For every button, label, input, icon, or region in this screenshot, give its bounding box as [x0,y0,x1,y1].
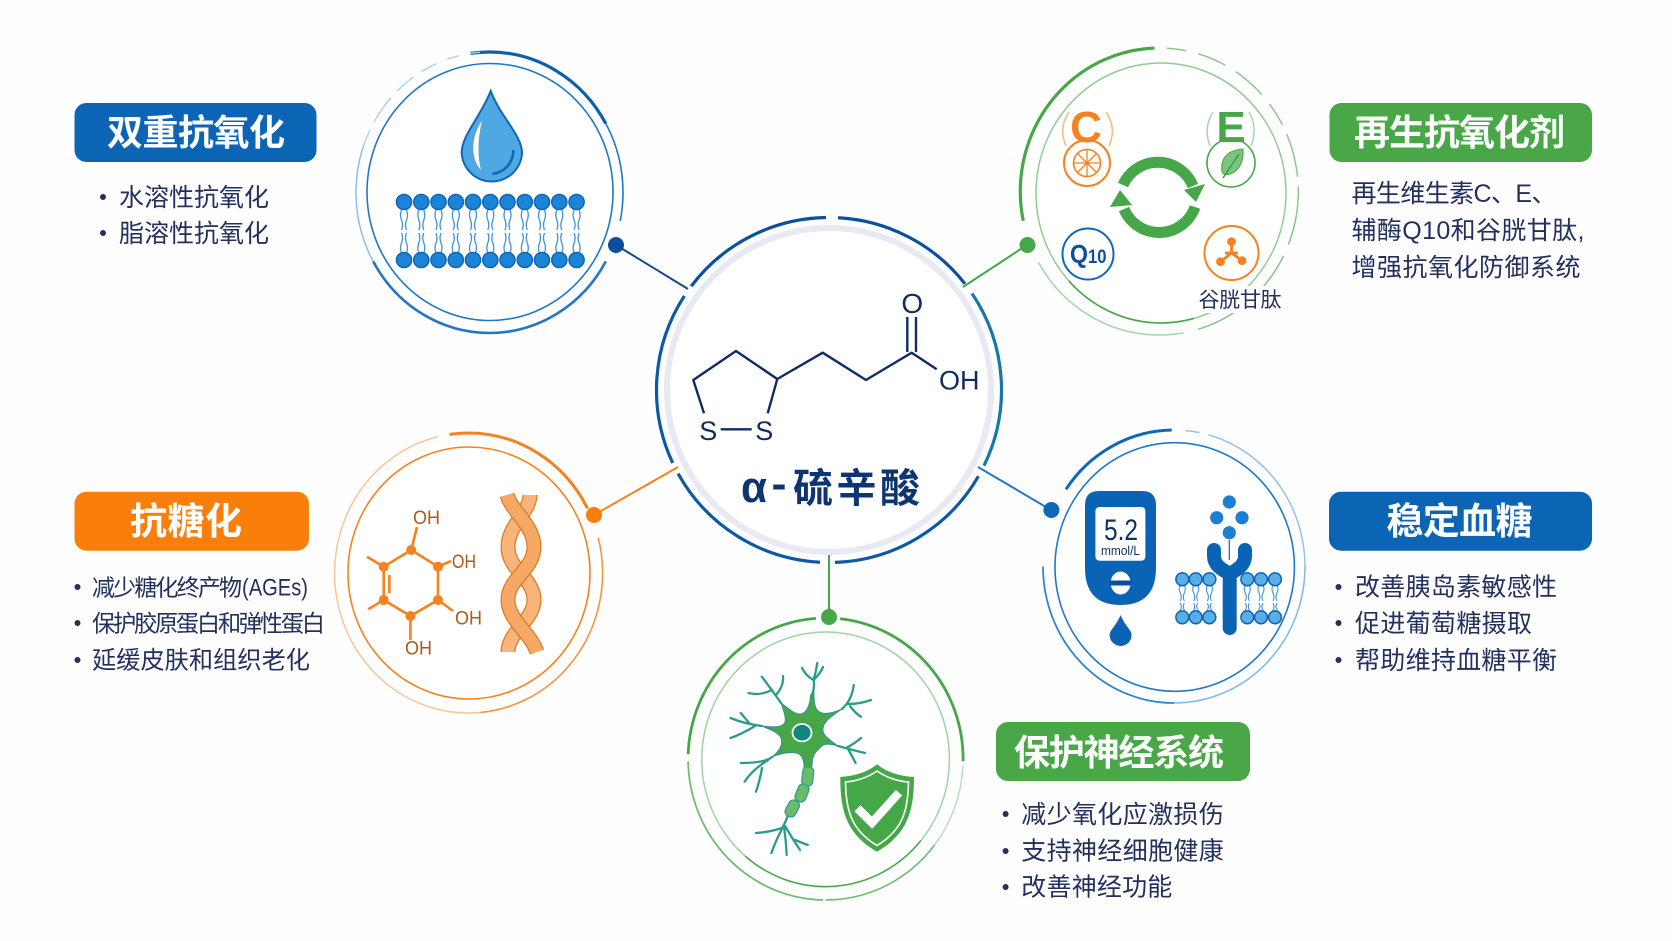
molecule: lipoic acid structure: OH [939,366,980,396]
heading: protect nervous system [996,722,1250,781]
icon: water drop [462,91,522,181]
central title: - [772,460,786,507]
icon: insulin receptor in membrane [1176,495,1281,628]
panel: dual antioxidant [74,52,624,333]
connector node [586,507,602,523]
connector node [1043,502,1059,518]
icon circle: neuron and shield [688,609,963,900]
label: glutathione: 谷胱甘肽 [1198,289,1282,312]
list: anti-glycation: 延缓皮肤和组织老化 [92,648,310,674]
heading: anti-glycation: 抗糖化 [130,501,242,542]
list: protect nervous system: 支持神经细胞健康 [1021,838,1224,866]
heading: dual antioxidant: 双重抗氧化 [107,112,285,153]
icon: coenzyme Q10 [1062,228,1114,280]
text: regenerated antioxidants description [1352,180,1584,282]
list: protect nervous system: 改善神经功能 [1021,874,1172,902]
text: regenerated antioxidants description: 再生维生素C、E、 [1352,180,1556,208]
list: stable blood sugar [1336,574,1557,675]
icon: glutathione [1204,226,1258,280]
molecule: lipoic acid structure [693,288,980,446]
icon: vitamin E leaf: E [1216,103,1246,152]
connector node [608,237,624,253]
connector node [821,609,837,625]
panel: regenerated antioxidants [1020,48,1592,335]
icon: glucose ring: OH [413,508,440,529]
central title: α [741,463,767,512]
list: anti-glycation [74,574,325,674]
list: dual antioxidant [100,184,269,248]
text: regenerated antioxidants description: 增强抗氧化防御系统 [1352,254,1580,282]
molecule: lipoic acid structure: S [755,416,773,446]
heading: regenerated antioxidants: 再生抗氧化剂 [1354,112,1565,153]
connector: central hub to dual antioxidant [616,245,688,289]
icon: glucose ring: OH [405,638,432,660]
icon: glucose meter [1085,491,1156,646]
molecule: lipoic acid structure: O [901,288,923,319]
connector: central hub to blood sugar [978,467,1051,510]
list: anti-glycation: 减少糖化终产物 [92,574,242,600]
icon: collagen helix [507,495,537,652]
list: protect nervous system: 减少氧化应激损伤 [1021,801,1224,829]
molecule: lipoic acid structure: S [699,416,717,446]
icon: coenzyme Q10: 10 [1088,247,1106,268]
icon: lipid bilayer [396,194,584,268]
icon: glucose ring [367,508,482,660]
list: dual antioxidant: 脂溶性抗氧化 [119,220,269,248]
icon: neuron [730,663,871,855]
icon: vitamin E leaf [1207,103,1255,187]
list: anti-glycation: 保护胶原蛋白和弹性蛋白 [92,610,325,636]
central title [741,460,920,512]
text: regenerated antioxidants description: 辅酶Q10和谷胱甘肽, [1352,217,1584,245]
list: stable blood sugar: 帮助维持血糖平衡 [1355,647,1557,675]
icon circle: sugar and collagen [335,433,603,713]
list: anti-glycation: (AGEs) [242,574,308,602]
connector node [1020,237,1036,253]
heading: protect nervous system: 保护神经系统 [1014,732,1224,773]
list: protect nervous system [1003,801,1224,902]
connector: central hub to regenerated antioxidants [963,245,1027,287]
icon: vitamin C citrus: C [1070,103,1102,152]
icon circle: glucose meter and receptor [1043,430,1305,703]
icon: cycle arrows [1110,162,1205,232]
connector: central hub to nervous system [828,555,830,617]
icon: vitamin C citrus [1063,103,1112,186]
heading: regenerated antioxidants [1330,103,1592,162]
icon: glucose ring: OH [455,608,482,630]
icon circle: droplet over membrane [356,52,624,333]
panel: anti-glycation [74,433,603,713]
central title: 硫辛酸 [793,467,920,511]
icon circle: regeneration cycle [1020,48,1298,335]
heading: stable blood sugar: 稳定血糖 [1386,501,1532,542]
panel: protect nervous system [688,609,1250,902]
heading: anti-glycation [74,492,309,551]
panel: stable blood sugar [1043,430,1592,703]
heading: stable blood sugar [1329,492,1592,551]
central hub circle [587,148,1071,632]
icon: coenzyme Q10: Q [1070,239,1088,269]
icon: glucose meter: 5.2 [1104,514,1138,547]
list: dual antioxidant: 水溶性抗氧化 [119,184,269,212]
connector: central hub to anti-glycation [594,467,678,515]
icon: glucose meter: mmol/L [1101,544,1140,558]
list: stable blood sugar: 促进葡萄糖摄取 [1355,610,1532,638]
heading: dual antioxidant [74,103,316,162]
icon: glucose ring: OH [452,552,476,573]
icon: shield with check [840,764,914,852]
list: stable blood sugar: 改善胰岛素敏感性 [1355,574,1557,602]
